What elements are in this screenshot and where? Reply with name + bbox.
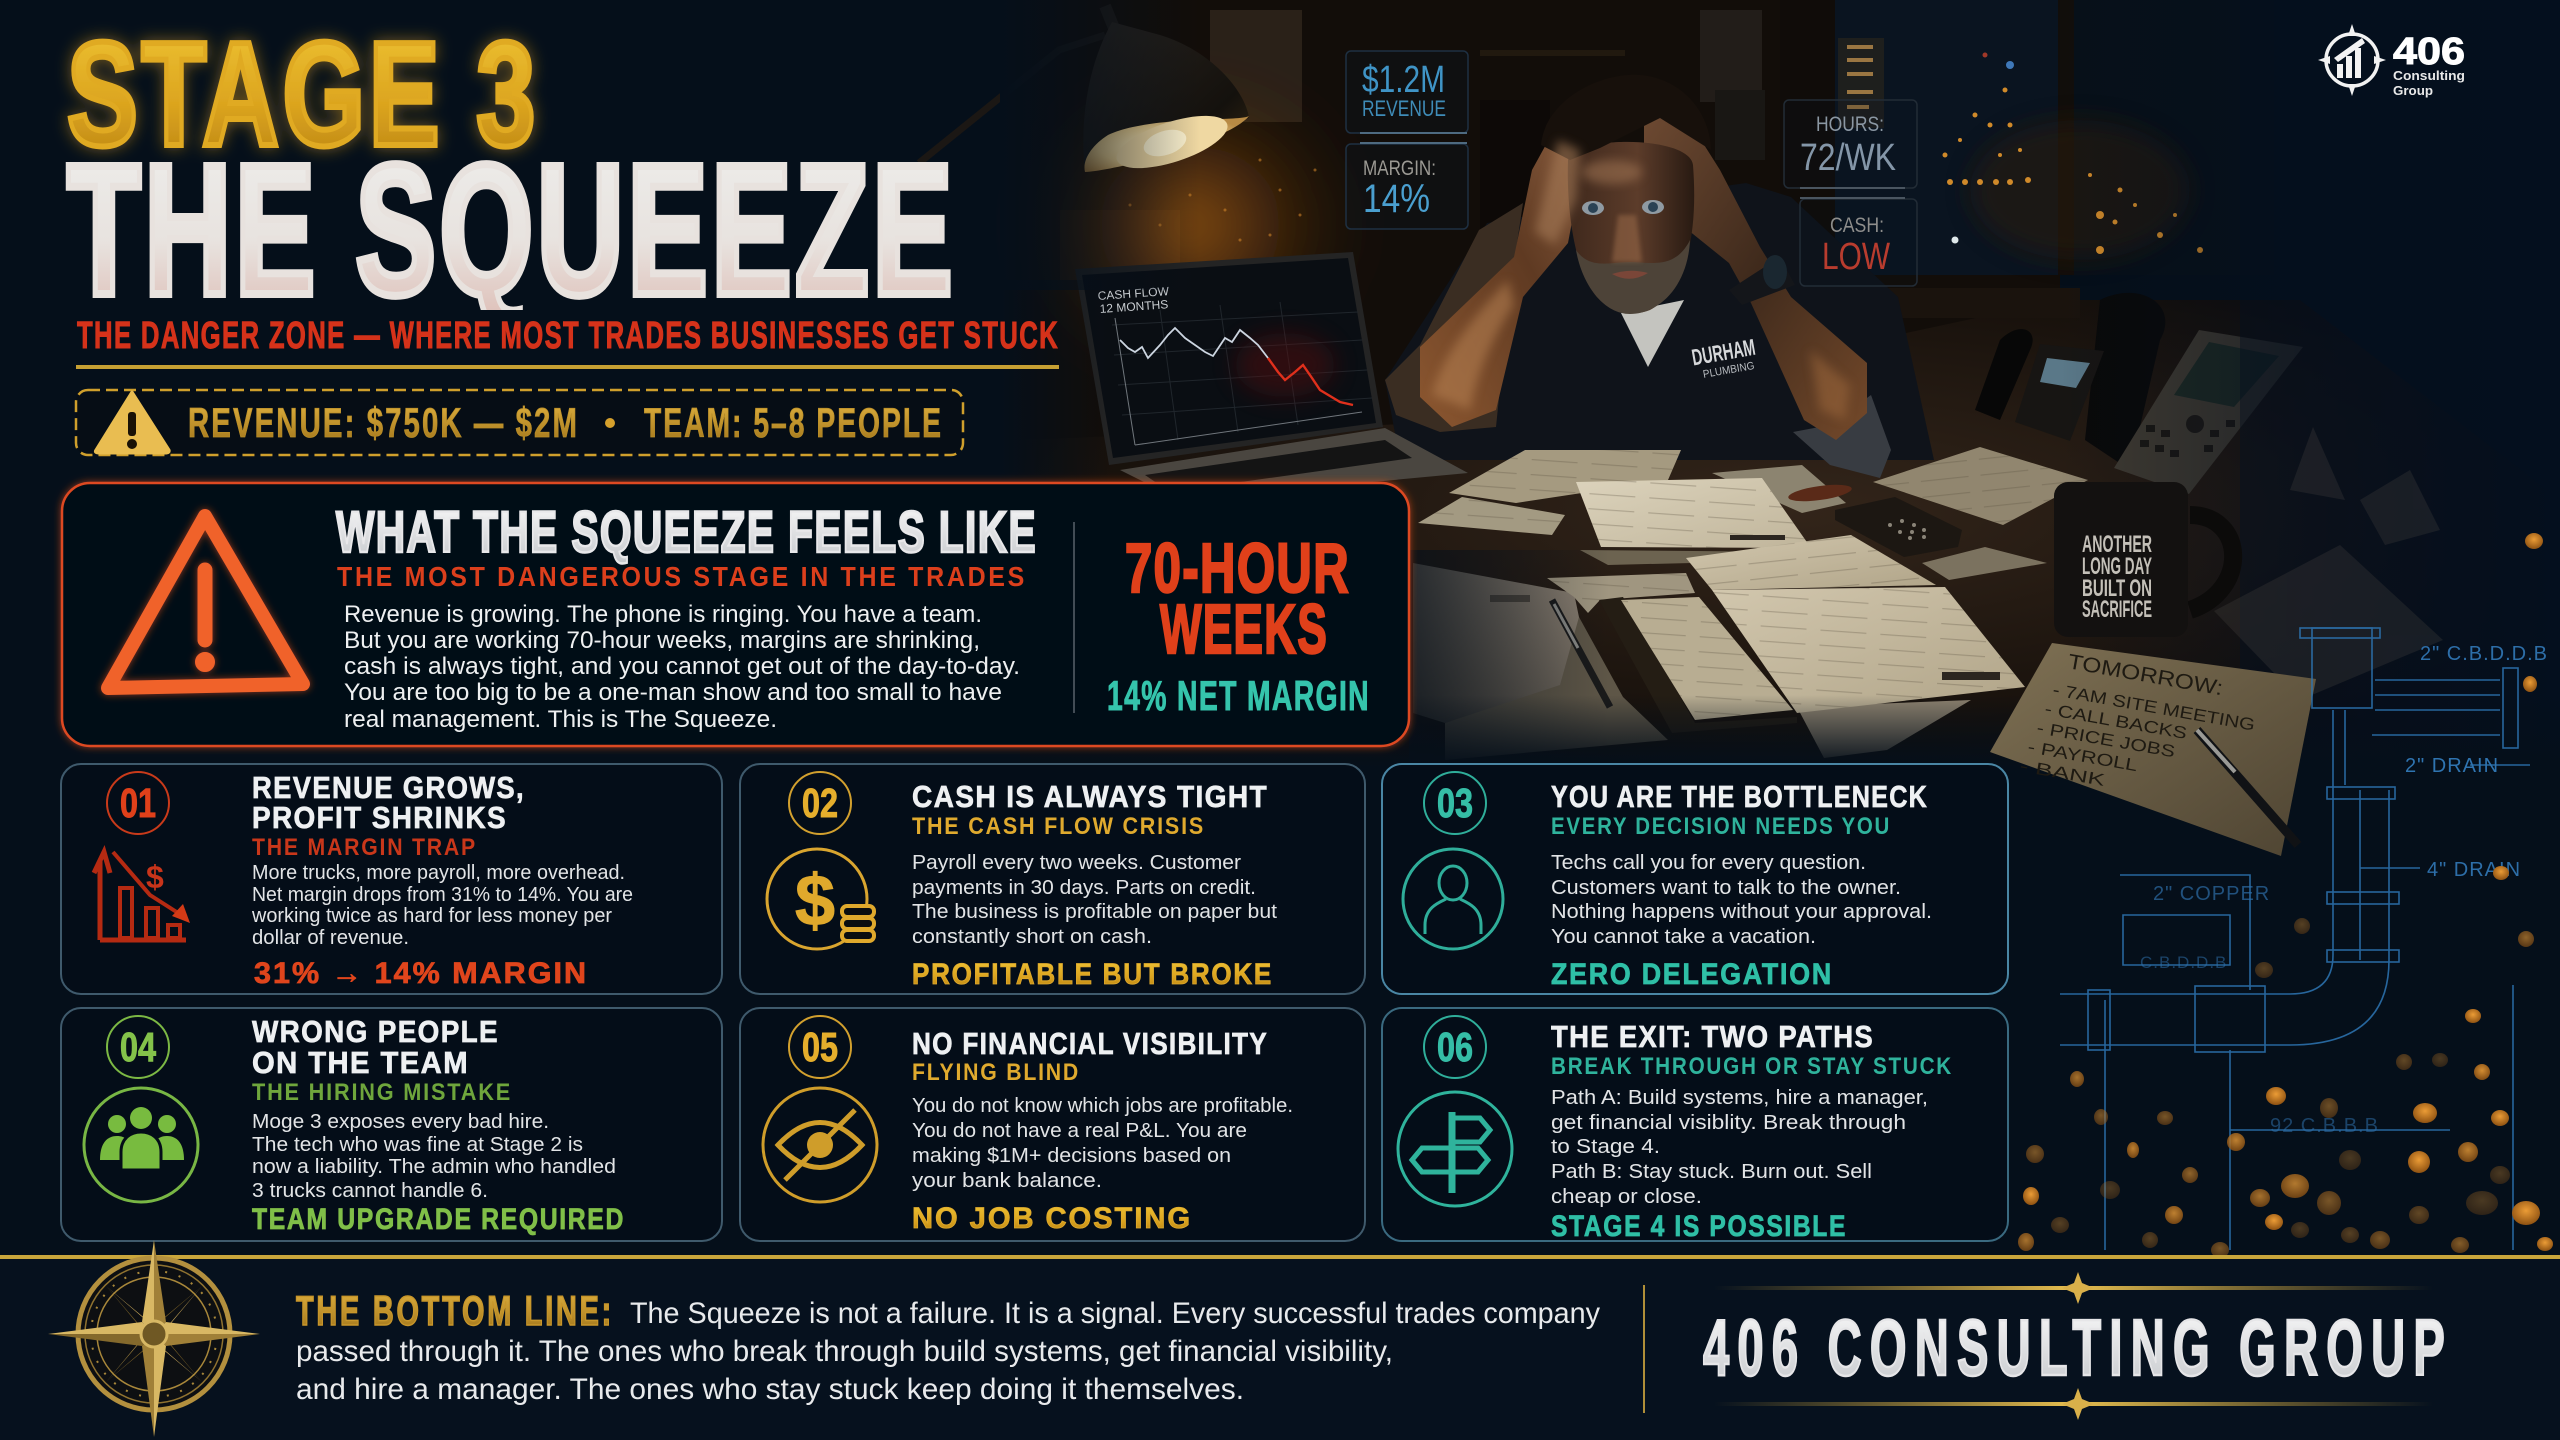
laptop chart line	[1120, 328, 1268, 358]
body text: working twice as hard for less money per	[251, 905, 612, 927]
panel body text	[344, 601, 1020, 733]
head	[1568, 142, 1694, 313]
gold footer line	[0, 1255, 2560, 1259]
fade right of photo	[2060, 0, 2560, 768]
number badge	[789, 772, 851, 834]
hud: revenue	[1346, 51, 1468, 133]
title: stage 3: STAGE 3	[67, 12, 539, 177]
callout: TEAM UPGRADE REQUIRED	[252, 1203, 625, 1236]
hud: cash: LOW	[1822, 236, 1890, 278]
body text: Customers want to talk to the owner.	[1551, 877, 1901, 899]
eyes	[1582, 201, 1604, 215]
subtitle: THE MARGIN TRAP	[252, 834, 477, 861]
cardinal rays	[48, 1240, 260, 1437]
body text: The business is profitable on paper but	[912, 901, 1277, 923]
body text: More trucks, more payroll, more overhead.	[252, 862, 625, 884]
top ornament	[1714, 1272, 2433, 1304]
number badge	[107, 1016, 169, 1078]
team text: TEAM: 5–8 PEOPLE	[644, 399, 943, 446]
fade left of desk	[1000, 280, 1110, 500]
bottom line text: The Squeeze is not a failure. It is a signal. Every successful trades company	[630, 1297, 1600, 1330]
t-shirt	[1621, 300, 1684, 367]
lamp arm	[919, 35, 1105, 163]
rolled sleeve left	[1385, 203, 1523, 432]
gold divider rule	[76, 365, 1059, 369]
fountain pen	[2197, 730, 2298, 845]
body text: 3 trucks cannot handle 6.	[252, 1180, 488, 1202]
stat: 70-hour weeks: 70-HOUR	[1125, 529, 1350, 607]
panel body text: Revenue is growing. The phone is ringing. You have a team.	[344, 601, 982, 628]
icon: crossed eye	[763, 1088, 877, 1202]
hud: cash: CASH:	[1830, 214, 1884, 237]
left forearm and hand	[1420, 130, 1586, 427]
body text: now a liability. The admin who handled	[252, 1156, 616, 1178]
card 06: the exit: two paths	[1382, 1008, 2008, 1243]
panel heading: WHAT THE SQUEEZE FEELS LIKE	[336, 500, 1037, 565]
stat: 70-hour weeks	[1125, 529, 1350, 668]
fade bottom of photo	[1020, 695, 2560, 768]
body text	[252, 1111, 616, 1202]
number badge	[107, 772, 169, 834]
coffee mug	[2054, 482, 2233, 637]
laptop red glow	[1235, 333, 1335, 397]
body text	[1551, 852, 1932, 948]
body text: dollar of revenue.	[252, 927, 409, 949]
coffee mug: LONG DAY	[2082, 553, 2152, 580]
number badge: 05	[802, 1024, 838, 1070]
blueprint labels: 2" C.B.D.D.B	[2420, 643, 2548, 665]
icon: falling bar chart	[94, 852, 190, 940]
card 01: revenue grows, profit shrinks	[61, 764, 722, 994]
skyline glow	[1970, 120, 2190, 260]
shirt logo	[1690, 334, 1759, 382]
icon: dollar and coins	[767, 849, 874, 949]
tomorrow notepad: - 7AM SITE MEETING	[2051, 680, 2256, 735]
panel body text: You are too big to be a one-man show and too small to have	[344, 679, 1002, 706]
tomorrow notepad: - CALL BACKS	[2043, 699, 2188, 743]
body text: Payroll every two weeks. Customer	[912, 852, 1241, 874]
laptop chart grid	[1112, 302, 1372, 440]
rolled sleeve right	[1793, 395, 1891, 478]
card 04: wrong people on the team	[61, 1008, 722, 1241]
card 01: revenue grows, profit shrinks: PROFIT SHRINKS	[252, 800, 507, 835]
logo: 406 consulting group: Group	[2393, 83, 2433, 98]
number badge	[1424, 772, 1486, 834]
stat: 70-hour weeks: WEEKS	[1160, 590, 1328, 668]
icon: person	[1403, 849, 1503, 949]
title: the squeeze: THE SQUEEZE	[67, 127, 956, 334]
hud: cash	[1800, 198, 1917, 286]
hud: margin	[1346, 143, 1468, 229]
stat: net margin: 14% NET MARGIN	[1107, 672, 1370, 719]
subtitle: danger zone: THE DANGER ZONE — WHERE MOST TRADES BUSINESSES GET STUCK	[77, 315, 1059, 357]
icon: dollar and coins: $	[795, 861, 835, 941]
panel body text: cash is always tight, and you cannot get out of the day-to-day.	[344, 653, 1020, 680]
watch	[1729, 257, 1795, 305]
body text: Moge 3 exposes every bad hire.	[252, 1111, 549, 1133]
body text: Net margin drops from 31% to 14%. You are	[252, 884, 633, 906]
lamp bulb	[1084, 116, 1249, 172]
callout: PROFITABLE BUT BROKE	[912, 958, 1273, 991]
body text: payments in 30 days. Parts on credit.	[912, 877, 1256, 899]
lamp dust particles	[1128, 158, 1316, 242]
forehead highlight	[1582, 160, 1642, 184]
diagonal rays	[106, 1286, 202, 1382]
number badge: 01	[120, 780, 156, 826]
icon: signpost	[1398, 1092, 1512, 1206]
body text	[912, 1095, 1293, 1192]
man torso	[1385, 75, 1934, 478]
pen on papers	[1552, 600, 1610, 707]
icon: gold compass	[48, 1240, 260, 1437]
subtitle: EVERY DECISION NEEDS YOU	[1551, 813, 1891, 840]
blueprint plumbing overlay	[2060, 628, 2530, 1250]
body text: You do not know which jobs are profitable.	[912, 1095, 1293, 1117]
title: YOU ARE THE BOTTLENECK	[1551, 779, 1928, 814]
icon: warning triangle	[95, 392, 169, 453]
shirt logo: PLUMBING	[1702, 360, 1755, 381]
fade left of photo	[1000, 0, 1200, 290]
hud: hours: HOURS:	[1816, 113, 1884, 136]
callout: ZERO DELEGATION	[1551, 958, 1833, 991]
icon: falling bar chart: $	[146, 859, 164, 895]
tomorrow notepad	[1990, 643, 2316, 856]
card 02: cash is always tight	[740, 764, 1365, 994]
blueprint labels: 92 C.B.B.B	[2270, 1115, 2379, 1137]
desk surface	[1020, 300, 2560, 768]
callout: STAGE 4 IS POSSIBLE	[1551, 1210, 1847, 1243]
number badge: 03	[1437, 780, 1473, 826]
callout: 31% → 14% MARGIN	[254, 957, 588, 990]
icon: logo compass	[2318, 24, 2386, 96]
laptop	[1075, 252, 1468, 500]
shirt logo: DURHAM	[1690, 334, 1757, 370]
number badge	[789, 1016, 851, 1078]
desk phones	[1975, 293, 2303, 494]
nose highlight	[1612, 215, 1642, 262]
revenue text: REVENUE: $750K — $2M	[188, 399, 579, 446]
laptop: 12 MONTHS	[1099, 297, 1169, 316]
lamp light glow	[1020, 75, 1360, 375]
coffee mug: ANOTHER	[2082, 531, 2152, 558]
body text: You cannot take a vacation.	[1551, 926, 1816, 948]
hud: revenue: REVENUE	[1362, 96, 1446, 121]
bottom line text: THE BOTTOM LINE:	[296, 1287, 614, 1334]
body text: your bank balance.	[912, 1170, 1102, 1192]
title: CASH IS ALWAYS TIGHT	[912, 779, 1268, 814]
title: REVENUE GROWS,	[252, 770, 525, 805]
body text: cheap or close.	[1551, 1186, 1702, 1208]
title: NO FINANCIAL VISIBILITY	[912, 1026, 1268, 1061]
card 03: you are the bottleneck	[1382, 764, 2008, 994]
desk papers	[1413, 447, 2088, 760]
body text: Path B: Stay stuck. Burn out. Sell	[1551, 1161, 1872, 1183]
left hand highlight	[1535, 140, 1580, 245]
beard	[1576, 240, 1690, 314]
body text	[251, 862, 633, 949]
orange bokeh lights	[2018, 533, 2553, 1258]
logo: 406 consulting group: Consulting	[2393, 68, 2465, 83]
body text: Nothing happens without your approval.	[1551, 901, 1932, 923]
hud: hours: 72/WK	[1800, 137, 1896, 179]
mouth	[1612, 271, 1648, 279]
bottom ornament	[1714, 1388, 2433, 1420]
subtitle: THE HIRING MISTAKE	[252, 1079, 512, 1106]
blueprint labels: 2" DRAIN	[2405, 755, 2499, 777]
barcode marks	[1490, 535, 2000, 680]
body text: The tech who was fine at Stage 2 is	[252, 1134, 583, 1156]
tomorrow notepad: - BANK	[2018, 756, 2107, 790]
body text: Techs call you for every question.	[1551, 852, 1866, 874]
wall shelves and frames	[1060, 10, 1765, 280]
subtitle: FLYING BLIND	[912, 1059, 1080, 1086]
revenue and team badge	[76, 390, 963, 455]
panel divider	[1073, 522, 1075, 713]
blueprint labels: C.B.D.D.B	[2140, 953, 2227, 972]
body text: making $1M+ decisions based on	[912, 1145, 1231, 1167]
back wall	[1000, 0, 2060, 480]
coffee mug: SACRIFICE	[2082, 596, 2152, 623]
body text: get financial visiblity. Break through	[1551, 1112, 1906, 1134]
number badge: 02	[802, 780, 838, 826]
night window with city lights	[1780, 0, 2274, 280]
hair	[1541, 75, 1711, 160]
right forearm and hand	[1644, 107, 1867, 440]
dim right-side papers	[2214, 427, 2443, 700]
blueprint labels: 4" DRAIN	[2427, 859, 2521, 881]
panel body text: But you are working 70-hour weeks, margins are shrinking,	[344, 627, 980, 654]
footer band	[0, 1240, 2560, 1440]
icon: large warning triangle	[108, 516, 303, 688]
hud: margin: 14%	[1363, 177, 1430, 221]
body text: to Stage 4.	[1551, 1136, 1660, 1158]
office photo scene	[919, 0, 2560, 856]
title: WRONG PEOPLE	[252, 1014, 499, 1049]
subtitle: BREAK THROUGH OR STAY STUCK	[1551, 1053, 1953, 1080]
fade left of papers	[1409, 550, 1609, 768]
logo: 406 consulting group: 406	[2393, 31, 2465, 73]
hud: hours	[1784, 100, 1917, 188]
body text: You do not have a real P&L. You are	[912, 1120, 1247, 1142]
card 05: no financial visibility	[740, 1008, 1365, 1241]
card 04: wrong people on the team: ON THE TEAM	[252, 1045, 469, 1080]
panel subheading: THE MOST DANGEROUS STAGE IN THE TRADES	[337, 561, 1027, 592]
icon: team	[84, 1088, 198, 1202]
logo: 406 consulting group	[2318, 24, 2465, 98]
bottom line text: passed through it. The ones who break through build systems, get financial visibility,	[296, 1335, 1393, 1368]
calculator	[1835, 497, 1962, 557]
number badge: 06	[1437, 1024, 1473, 1070]
callout: NO JOB COSTING	[912, 1202, 1192, 1235]
panel body text: real management. This is The Squeeze.	[344, 706, 777, 733]
coffee mug: BUILT ON	[2082, 575, 2152, 602]
number badge	[1424, 1016, 1486, 1078]
body text: constantly short on cash.	[912, 926, 1152, 948]
bullet	[605, 418, 615, 428]
bottom line text	[296, 1287, 1600, 1406]
number badge: 04	[120, 1024, 156, 1070]
lamp shade	[1083, 22, 1249, 172]
tomorrow notepad: - PAYROLL	[2026, 737, 2139, 775]
blueprint labels: 2" COPPER	[2153, 883, 2270, 905]
blueprint labels	[2140, 643, 2548, 1137]
footer divider	[1643, 1285, 1645, 1413]
subtitle: THE CASH FLOW CRISIS	[912, 813, 1205, 840]
laptop title: CASH FLOW	[1097, 284, 1170, 303]
panel: what the squeeze feels like	[62, 483, 1409, 746]
title: THE EXIT: TWO PATHS	[1551, 1019, 1874, 1054]
hud: revenue: $1.2M	[1362, 59, 1445, 101]
hud: margin: MARGIN:	[1363, 157, 1436, 180]
red object	[1787, 482, 1853, 504]
tomorrow notepad: - PRICE JOBS	[2035, 718, 2176, 761]
body text	[1551, 1087, 1928, 1208]
body text	[912, 852, 1277, 948]
body text: Path A: Build systems, hire a manager,	[1551, 1087, 1928, 1109]
bottom line text: and hire a manager. The ones who stay stuck keep doing it themselves.	[296, 1373, 1244, 1406]
lamp	[919, 6, 1249, 179]
tomorrow notepad: TOMORROW:	[2066, 650, 2225, 700]
forearm highlight	[1432, 280, 1514, 410]
